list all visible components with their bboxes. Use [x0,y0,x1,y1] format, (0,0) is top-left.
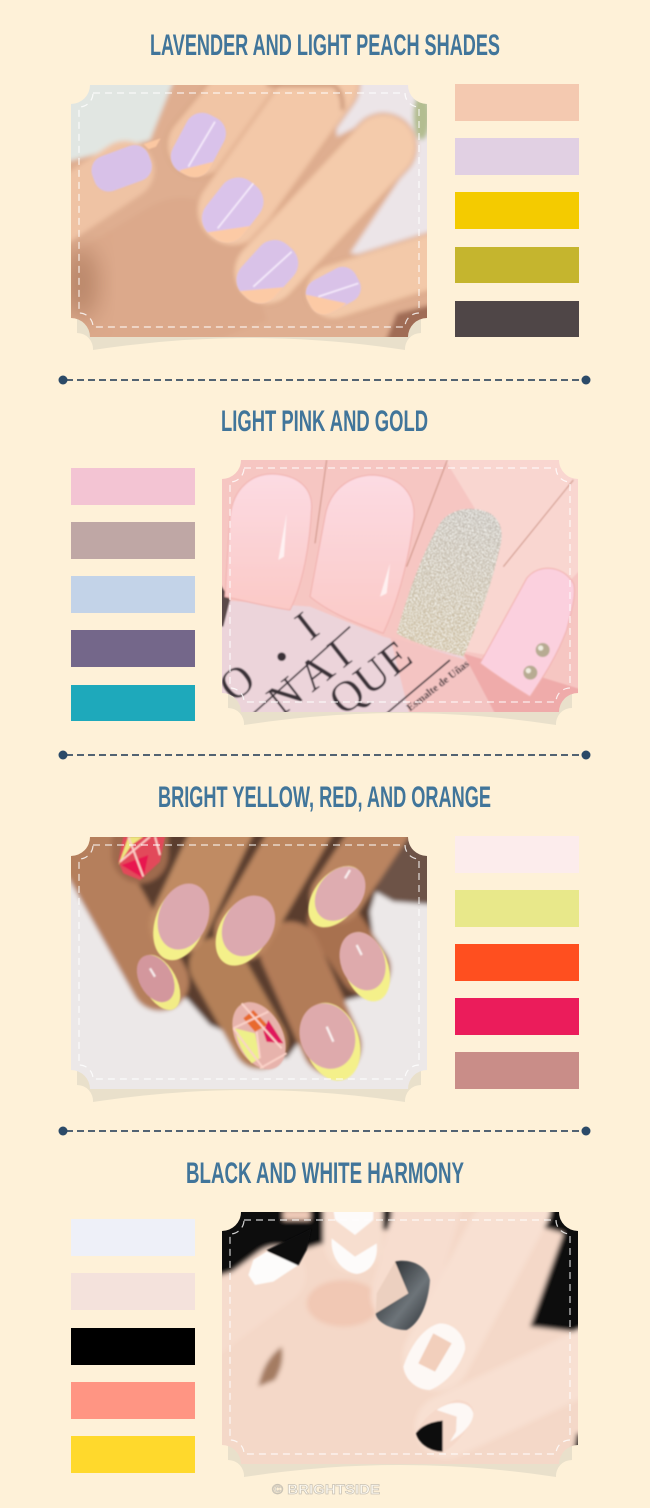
fingers [83,845,160,982]
nails [118,837,399,1088]
bottle label: NAI [258,626,366,725]
nails [248,1210,474,1453]
bottle label: I [287,603,328,650]
photo: black and white nails [222,1212,578,1477]
colour swatches [71,1219,195,1473]
argyle nail [232,1001,286,1070]
photo: lavender and peach nails [71,85,427,350]
nails [90,112,362,314]
panel: lavender and light peach [40,29,579,350]
colour swatches [71,468,195,721]
heading: light pink and gold: LIGHT PINK AND GOLD [221,405,428,438]
fingers [40,170,125,227]
bottle label: Esmalte de Uñas [405,659,472,714]
panel: light pink and gold [71,405,583,725]
photo: yellow french tip nails [67,822,437,1102]
bottle label [210,603,472,725]
heading: black and white harmony: BLACK AND WHITE HARMONY [186,1157,464,1190]
panel: black and white harmony [71,1157,623,1477]
bottle label: QUE [320,631,421,725]
watermark: © BRIGHTSIDE [272,1481,380,1497]
fingers [228,1240,284,1274]
photo: pink and gold nails [210,457,583,725]
nails [225,474,312,610]
colour swatches [455,836,579,1089]
panel: bright yellow, red and orange [67,781,579,1102]
colour swatches [455,84,579,337]
bottle label: O [210,654,264,711]
